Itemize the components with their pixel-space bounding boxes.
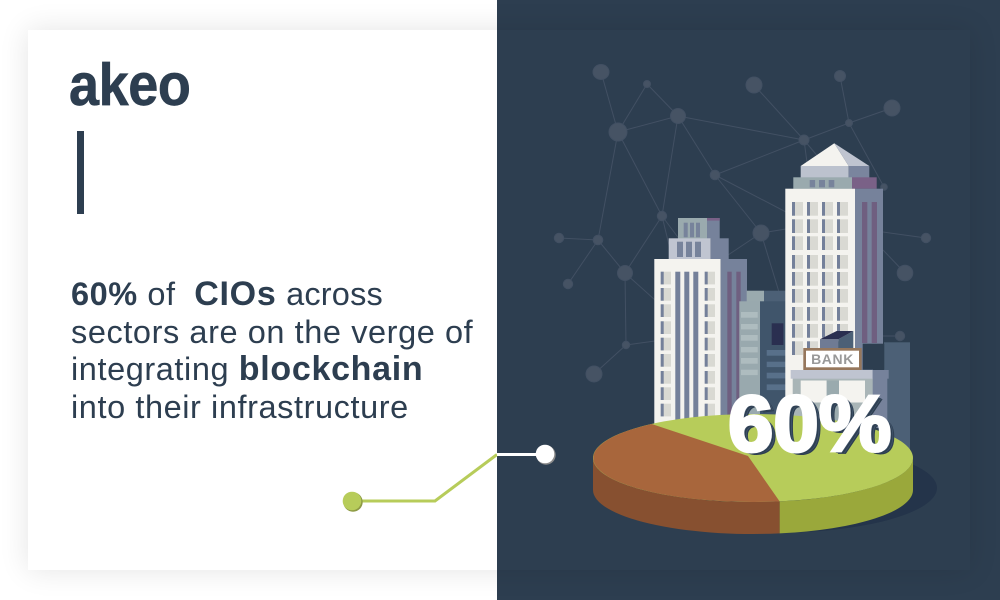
logo: akeo	[69, 52, 190, 118]
bank building	[791, 331, 889, 428]
vertical accent bar	[77, 131, 84, 214]
big 60% figure: 60%	[728, 379, 891, 468]
pie chart	[593, 414, 913, 534]
headline text	[71, 275, 473, 425]
panel: dark background	[497, 0, 1000, 600]
connector start dot	[343, 492, 363, 512]
bank sign label: BANK	[811, 351, 854, 367]
middle building	[739, 291, 786, 426]
network graph background	[554, 64, 931, 382]
headline text: 60% of CIOs across	[71, 275, 383, 313]
connector line	[352, 454, 545, 501]
headline text: into their infrastructure	[71, 389, 409, 425]
headline text: integrating blockchain	[71, 350, 423, 388]
back building right	[884, 342, 910, 452]
headline text: sectors are on the verge of	[71, 314, 473, 350]
pie shadow	[607, 443, 937, 533]
right tower	[785, 143, 883, 428]
dark block beside bank	[863, 344, 884, 370]
left tower	[654, 218, 747, 427]
connector end dot	[536, 445, 556, 465]
panel: white card	[28, 30, 497, 570]
